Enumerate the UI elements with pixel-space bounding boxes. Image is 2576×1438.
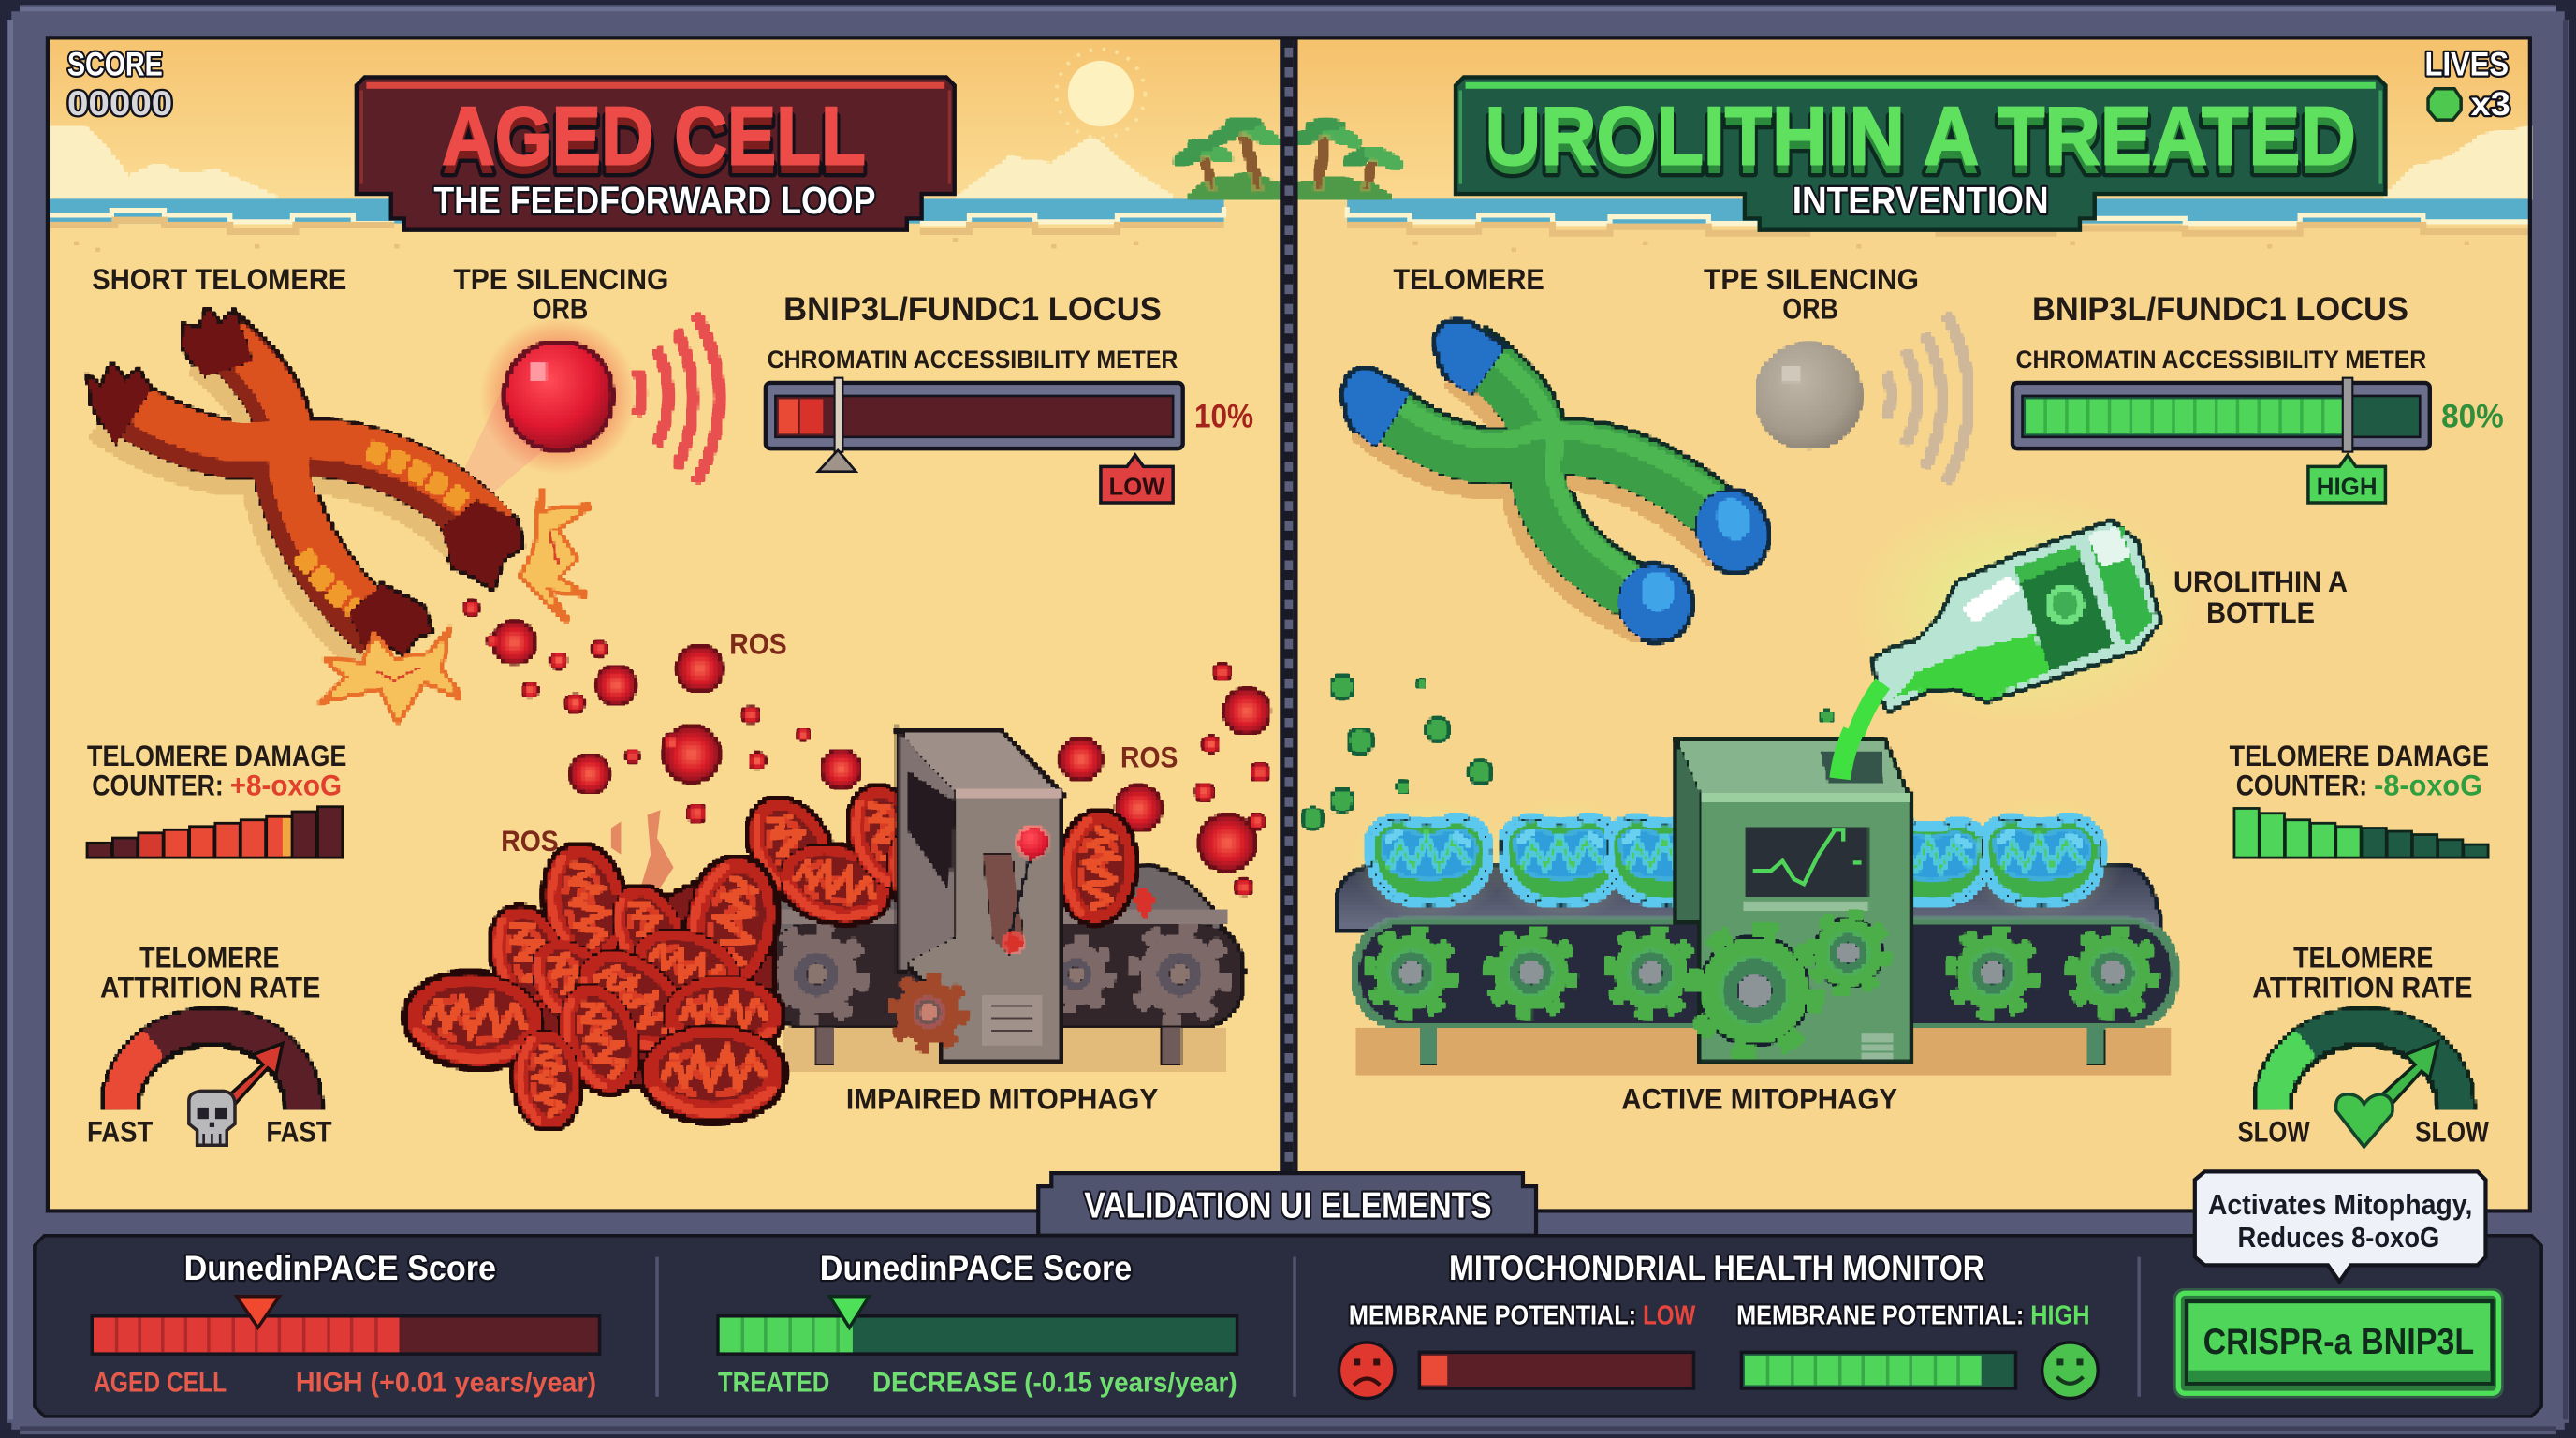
value 10%: 10% — [1194, 398, 1253, 434]
machine aged — [899, 731, 1060, 1062]
signal waves red — [637, 315, 720, 481]
gauge right — [2272, 1025, 2456, 1109]
mitochondrial health monitor: HIGH — [2030, 1301, 2089, 1331]
mitochondrial health monitor: MITOCHONDRIAL HEALTH MONITOR — [1449, 1249, 1984, 1287]
dunedinpace aged: DunedinPACE Score — [184, 1249, 496, 1287]
title banner: aged cell: THE FEEDFORWARD LOOP — [433, 179, 875, 222]
label: telomere damage left: +8-oxoG — [230, 768, 342, 801]
title banner: urolithin a treated: UROLITHIN A TREATED — [1486, 91, 2356, 183]
score — [67, 47, 172, 123]
title banner: urolithin a treated — [1456, 77, 2385, 230]
lives: LIVES — [2425, 47, 2509, 83]
label: telomere damage right: COUNTER: — [2236, 768, 2367, 801]
panel: aged cell background — [48, 37, 1288, 1211]
dunedinpace aged — [92, 1249, 600, 1399]
value 80%: 80% — [2441, 398, 2504, 434]
tpe orb red — [479, 317, 637, 475]
label: tpe silencing orb left: ORB — [533, 291, 588, 325]
palm island left — [1172, 115, 1281, 198]
label: tpe silencing orb right: ORB — [1782, 291, 1838, 325]
validation tab — [1038, 1173, 1536, 1236]
title banner: urolithin a treated: INTERVENTION — [1793, 179, 2049, 222]
signal waves gray — [1886, 315, 1969, 481]
sun — [1057, 50, 1145, 138]
label: tpe silencing orb left — [453, 262, 668, 325]
label: telomere damage left: TELOMERE DAMAGE — [87, 739, 346, 772]
tag high — [2308, 455, 2385, 503]
clouds — [48, 128, 2530, 198]
membrane bar high — [1741, 1352, 2016, 1388]
stream into machine — [1840, 731, 1853, 779]
center divider — [1280, 37, 1298, 1175]
chromosome: short telomere — [89, 309, 522, 654]
label: ros 2: ROS — [1120, 741, 1178, 774]
label: tpe silencing orb left: TPE SILENCING — [453, 262, 668, 296]
tag high: HIGH — [2317, 472, 2378, 500]
smoke above pile — [585, 810, 674, 930]
label: telomere damage right: -8-oxoG — [2374, 768, 2482, 801]
label: telomere damage left: COUNTER: — [92, 768, 224, 801]
label: attrition right — [2252, 941, 2472, 1004]
ros particles — [465, 601, 1268, 895]
label: tpe silencing orb right: TPE SILENCING — [1704, 262, 1919, 296]
mitochondrial health monitor: LOW — [1643, 1301, 1696, 1331]
label: telomere damage left — [87, 739, 346, 801]
tooltip callout: Activates Mitophagy, — [2208, 1188, 2472, 1221]
dunedinpace treated: DECREASE (-0.15 years/year) — [872, 1368, 1237, 1399]
score: SCORE — [67, 47, 163, 83]
explosion bursts — [326, 490, 588, 720]
label: fast left: FAST — [87, 1115, 153, 1149]
label: telomere right: TELOMERE — [1393, 262, 1544, 296]
beach water band — [48, 198, 2530, 250]
chromosome: healthy telomere — [1344, 322, 1778, 651]
label: urolithin a bottle: UROLITHIN A — [2174, 565, 2348, 598]
urolithin a bottle — [1847, 490, 2202, 726]
panel inner border — [48, 37, 2530, 1211]
dunedinpace aged: AGED CELL — [94, 1368, 227, 1399]
healthy mitochondria — [1347, 795, 2126, 920]
beam from chromosome to orb — [457, 374, 567, 493]
label: attrition right: TELOMERE — [2293, 941, 2433, 975]
label: attrition left: TELOMERE — [139, 941, 279, 975]
mitochondrial health monitor — [1349, 1249, 2089, 1331]
console panel — [35, 1236, 2541, 1416]
monitor trace — [1753, 829, 1862, 884]
gauge left — [120, 1025, 304, 1109]
tooltip callout: Reduces 8-oxoG — [2237, 1221, 2439, 1254]
lives — [2425, 47, 2510, 123]
label: telomere damage right — [2230, 739, 2489, 801]
tag low: LOW — [1109, 472, 1165, 500]
button: crispr-a bnip3l: CRISPR-a BNIP3L — [2203, 1322, 2474, 1362]
label: slow left: SLOW — [2237, 1115, 2310, 1149]
chromatin meter right — [2012, 378, 2430, 452]
tag low — [1101, 455, 1173, 503]
label: meter right: CHROMATIN ACCESSIBILITY METER — [2016, 345, 2427, 374]
chromatin meter left — [766, 378, 1183, 472]
icon: sad face — [1339, 1343, 1395, 1399]
tooltip callout — [2195, 1171, 2485, 1282]
dunedinpace treated — [718, 1249, 1237, 1399]
label: active mitophagy: ACTIVE MITOPHAGY — [1621, 1082, 1897, 1116]
tpe orb gray — [1756, 344, 1862, 448]
machine gears — [1696, 917, 1884, 1049]
title banner: urolithin a treated: UROLITHIN A TREATED — [1486, 99, 2356, 191]
label: urolithin a bottle — [2174, 565, 2348, 629]
label: telomere damage right: TELOMERE DAMAGE — [2230, 739, 2489, 772]
label: attrition left: ATTRITION RATE — [100, 970, 320, 1004]
title banner: aged cell: AGED CELL — [442, 99, 866, 191]
label: tpe silencing orb right — [1704, 262, 1919, 325]
dunedinpace aged: HIGH (+0.01 years/year) — [296, 1368, 596, 1399]
label: meter left: CHROMATIN ACCESSIBILITY METER — [768, 345, 1178, 374]
dunedinpace treated: DunedinPACE Score — [820, 1249, 1132, 1287]
label: attrition left — [100, 941, 320, 1004]
button: crispr-a bnip3l — [2174, 1288, 2504, 1399]
conveyor active — [1339, 868, 2175, 1073]
skull icon — [189, 1091, 235, 1145]
label: impaired mitophagy: IMPAIRED MITOPHAGY — [846, 1082, 1158, 1116]
label: ros 3: ROS — [501, 824, 559, 858]
label: ros 1: ROS — [729, 627, 787, 661]
conveyor aged — [759, 868, 1242, 1071]
title banner: aged cell: AGED CELL — [442, 91, 866, 183]
panel: treated background — [1288, 37, 2530, 1211]
membrane bar low — [1419, 1352, 1694, 1388]
damage bars right — [2234, 808, 2488, 858]
label: locus right: BNIP3L/FUNDC1 LOCUS — [2032, 291, 2408, 328]
mitochondria on aged belt — [731, 776, 1153, 935]
green particles — [1304, 677, 1832, 827]
label: fast right: FAST — [266, 1115, 332, 1149]
machine active — [1677, 740, 1909, 1062]
heart icon — [2336, 1094, 2393, 1147]
pouring stream — [1847, 683, 1882, 775]
label: attrition right: ATTRITION RATE — [2252, 970, 2472, 1004]
score: 00000 — [67, 84, 172, 123]
label: locus left: BNIP3L/FUNDC1 LOCUS — [783, 291, 1162, 328]
dunedinpace treated: TREATED — [718, 1368, 829, 1399]
pile of damaged mitochondria — [402, 839, 786, 1132]
mitochondrial health monitor: MEMBRANE POTENTIAL: — [1349, 1301, 1636, 1331]
small rusty gear — [896, 979, 961, 1045]
label: short telomere: SHORT TELOMERE — [92, 262, 346, 296]
label: urolithin a bottle: BOTTLE — [2206, 595, 2315, 629]
lives: x3 — [2471, 86, 2510, 123]
title banner: aged cell — [357, 77, 955, 230]
palm island right — [1289, 117, 1404, 198]
validation tab: VALIDATION UI ELEMENTS — [1084, 1185, 1492, 1225]
icon: happy face — [2042, 1343, 2098, 1399]
damage bars left — [87, 807, 343, 858]
mitochondrial health monitor: MEMBRANE POTENTIAL: — [1736, 1301, 2024, 1331]
label: slow right: SLOW — [2415, 1115, 2489, 1149]
